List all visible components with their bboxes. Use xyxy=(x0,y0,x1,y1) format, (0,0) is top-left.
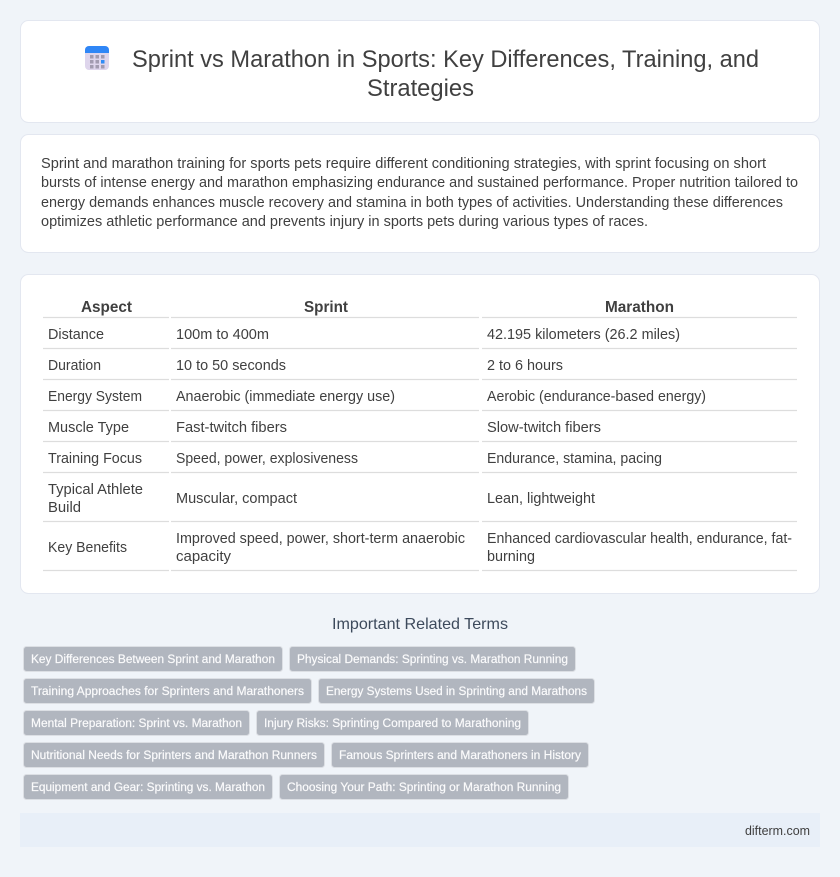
tag: Key Differences Between Sprint and Marathon xyxy=(31,652,275,666)
title: Sprint vs Marathon in Sports: Key Differences, Training, and xyxy=(132,46,759,73)
tag: Choosing Your Path: Sprinting or Marathon Running xyxy=(287,780,561,794)
table row: energy system xyxy=(48,389,706,405)
text block: intro xyxy=(41,156,798,230)
table grid xyxy=(43,318,797,570)
table row: key benefits: Key Benefits xyxy=(48,540,127,556)
table row: key benefits: Improved speed, power, short-term anaerobic xyxy=(176,531,465,547)
tag: Equipment and Gear: Sprinting vs. Marathon xyxy=(31,780,265,794)
panel: header xyxy=(20,20,820,122)
table header xyxy=(81,299,674,316)
tag xyxy=(24,678,312,704)
text block: intro: energy demands enhances muscle recovery and stamina in both types of activities. Understanding these differences xyxy=(41,195,783,211)
tag: Nutritional Needs for Sprinters and Marathon Runners xyxy=(31,748,317,762)
table row: training focus xyxy=(48,451,662,467)
tag: Injury Risks: Sprinting Compared to Marathoning xyxy=(264,716,521,730)
tag xyxy=(24,646,282,672)
table row: training focus: Speed, power, explosiveness xyxy=(176,451,358,467)
tag: Training Approaches for Sprinters and Marathoners xyxy=(31,684,304,698)
table row: distance: 42.195 kilometers (26.2 miles) xyxy=(487,327,680,343)
table row: training focus: Endurance, stamina, pacing xyxy=(487,451,662,467)
table row: muscle type: Muscle Type xyxy=(48,420,129,436)
tag xyxy=(332,742,588,768)
heading: important related terms: Important Related Terms xyxy=(332,616,508,633)
tag xyxy=(256,710,528,736)
table row: distance: Distance xyxy=(48,327,104,343)
table row: key benefits: Enhanced cardiovascular health, endurance, fat- xyxy=(487,531,792,547)
table row: typical athlete build xyxy=(48,482,595,516)
title xyxy=(132,46,759,102)
table row: duration xyxy=(48,358,563,374)
table row: key benefits: burning xyxy=(487,549,535,565)
panel: comparison table xyxy=(20,274,820,594)
tag xyxy=(290,646,576,672)
tag: Energy Systems Used in Sprinting and Marathons xyxy=(326,684,587,698)
table row: duration: Duration xyxy=(48,358,101,374)
table header: Sprint xyxy=(304,299,349,316)
footer: difterm.com xyxy=(745,824,810,838)
tag xyxy=(318,678,594,704)
table row: muscle type: Slow-twitch fibers xyxy=(487,420,601,436)
table row: typical athlete build: Muscular, compact xyxy=(176,491,297,507)
table header: Aspect xyxy=(81,299,133,316)
footer xyxy=(20,813,820,847)
table row: duration: 10 to 50 seconds xyxy=(176,358,286,374)
tag xyxy=(24,742,324,768)
tag xyxy=(280,774,568,800)
table row: energy system: Aerobic (endurance-based energy) xyxy=(487,389,706,405)
text block: intro: Sprint and marathon training for sports pets require different conditioning strategies, with sprint focusing on short xyxy=(41,156,766,172)
title: Strategies xyxy=(367,75,474,102)
tag: Famous Sprinters and Marathoners in History xyxy=(339,748,582,762)
table row: typical athlete build: Typical Athlete xyxy=(48,482,143,498)
table header: Marathon xyxy=(605,299,674,316)
text block: intro: bursts of intense energy and marathon emphasizing endurance and sustained performance. Proper nutrition tailored to xyxy=(41,175,798,191)
icon: calendar xyxy=(85,46,109,70)
panel: related term tags xyxy=(24,646,594,800)
table row: key benefits xyxy=(48,531,792,565)
table row: key benefits: capacity xyxy=(176,549,232,565)
tag xyxy=(24,710,250,736)
table row: duration: 2 to 6 hours xyxy=(487,358,563,374)
tag xyxy=(24,774,272,800)
tag: Mental Preparation: Sprint vs. Marathon xyxy=(31,716,242,730)
table row: distance xyxy=(48,327,680,343)
table row: energy system: Energy System xyxy=(48,389,142,405)
table row: muscle type xyxy=(48,420,601,436)
table row: typical athlete build: Build xyxy=(48,500,81,516)
table row: energy system: Anaerobic (immediate energy use) xyxy=(176,389,395,405)
table row: muscle type: Fast-twitch fibers xyxy=(176,420,287,436)
panel: intro paragraph xyxy=(20,134,820,252)
table row: distance: 100m to 400m xyxy=(176,327,269,343)
tag: Physical Demands: Sprinting vs. Marathon Running xyxy=(297,652,568,666)
table row: training focus: Training Focus xyxy=(48,451,142,467)
text block: intro: optimizes athletic performance and prevents injury in sports pets during various types of races. xyxy=(41,214,648,230)
table row: typical athlete build: Lean, lightweight xyxy=(487,491,595,507)
